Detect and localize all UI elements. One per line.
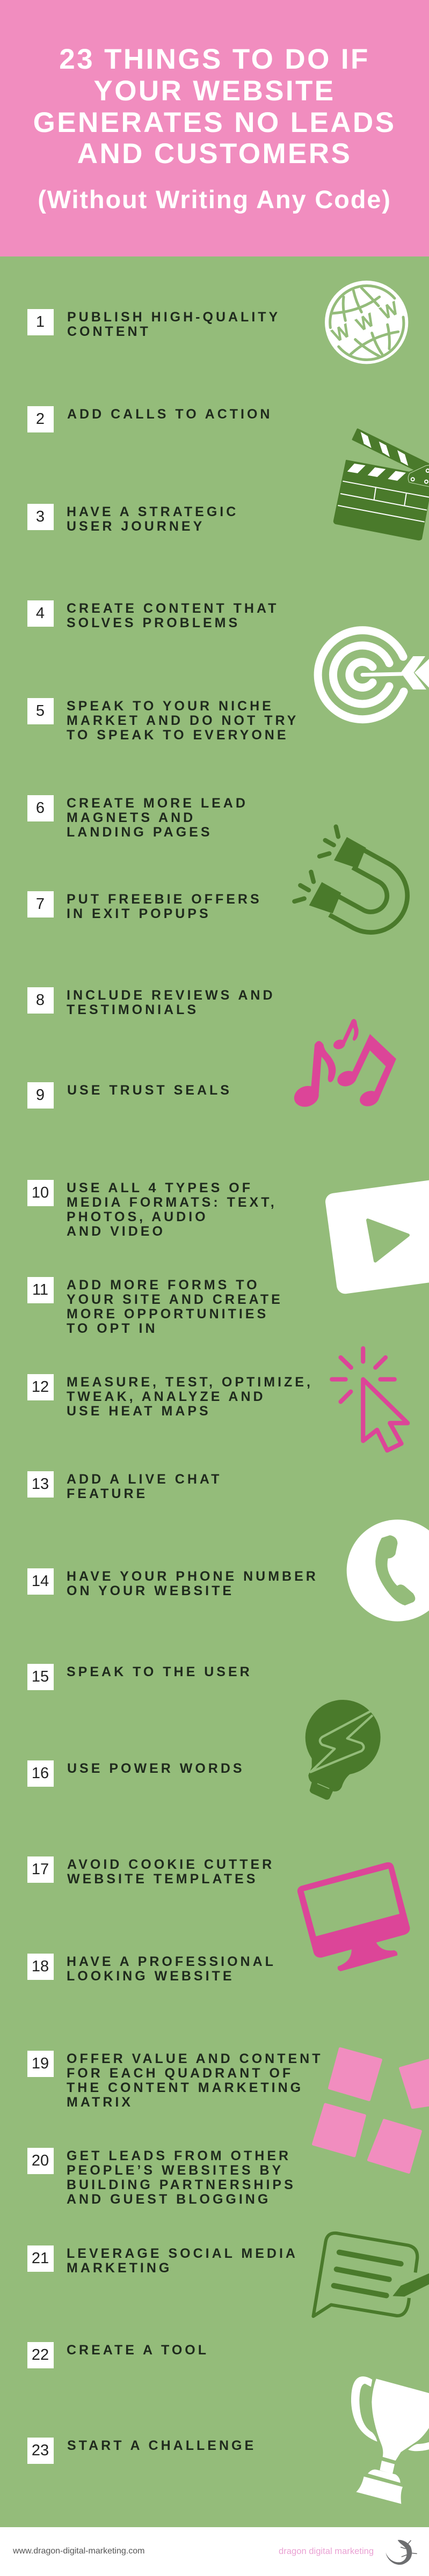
item 20 (27, 2148, 296, 2207)
item 11: 11 (32, 1281, 48, 1298)
item 15: SPEAK TO THE USER (67, 1664, 252, 1679)
item 2 (27, 406, 273, 432)
item 5: MARKET AND DO NOT TRY (67, 713, 299, 728)
item 22 (27, 2342, 209, 2368)
item 19: FOR EACH QUADRANT OF (67, 2066, 293, 2081)
icon: www globe: W (329, 321, 353, 346)
item 9 (27, 1082, 232, 1109)
item 4 (27, 600, 279, 630)
item 21: MARKETING (67, 2261, 172, 2276)
item 1 (27, 309, 280, 339)
item 12: 12 (32, 1378, 49, 1396)
item 14: HAVE YOUR PHONE NUMBER (67, 1569, 318, 1584)
icon: target with arrow (318, 630, 429, 720)
item 3: 3 (36, 508, 45, 525)
item 20: AND GUEST BLOGGING (67, 2192, 271, 2207)
subtitle: (Without Writing Any Code) (38, 185, 391, 214)
icon: www globe (325, 281, 408, 364)
item 12: USE HEAT MAPS (67, 1404, 211, 1419)
item 1: CONTENT (67, 324, 151, 339)
item 20: 20 (32, 2152, 49, 2169)
item 20: PEOPLE’S WEBSITES BY (67, 2163, 283, 2178)
item 12 (27, 1374, 313, 1419)
item 8: INCLUDE REVIEWS AND (67, 988, 275, 1003)
title: 23 THINGS TO DO IF (59, 43, 370, 75)
item 13: ADD A LIVE CHAT (67, 1472, 222, 1487)
icon: trophy (351, 2376, 429, 2504)
item 12: MEASURE, TEST, OPTIMIZE, (67, 1375, 313, 1390)
item 11: YOUR SITE AND CREATE (67, 1292, 283, 1307)
item 1: PUBLISH HIGH-QUALITY (67, 310, 280, 325)
item 11: ADD MORE FORMS TO (67, 1278, 260, 1293)
item 7: 7 (36, 896, 45, 913)
item 6: CREATE MORE LEAD (67, 796, 248, 811)
item 3 (27, 504, 238, 534)
item 19: MATRIX (67, 2095, 133, 2110)
item 3: USER JOURNEY (67, 519, 205, 534)
icon: film clapper (334, 429, 429, 540)
item 8: 8 (36, 992, 45, 1009)
item 8: TESTIMONIALS (67, 1002, 199, 1017)
item 5 (27, 698, 299, 743)
item 20: BUILDING PARTNERSHIPS (67, 2177, 296, 2192)
item 10: AND VIDEO (67, 1224, 165, 1239)
item 5: TO SPEAK TO EVERYONE (67, 728, 289, 743)
item 6: 6 (36, 799, 45, 817)
item 22: 22 (32, 2346, 49, 2364)
footer url: www.dragon-digital-marketing.com (13, 2546, 144, 2555)
item 2: ADD CALLS TO ACTION (67, 407, 273, 422)
icon: video play card (324, 1176, 429, 1295)
item 16: 16 (32, 1765, 49, 1782)
item 3: HAVE A STRATEGIC (67, 504, 238, 519)
header panel (0, 0, 429, 256)
item 10 (27, 1180, 277, 1239)
item 13: FEATURE (67, 1486, 148, 1501)
title (33, 43, 396, 170)
item 4: 4 (36, 605, 45, 622)
item 17: WEBSITE TEMPLATES (67, 1872, 258, 1887)
item 14: ON YOUR WEBSITE (67, 1583, 234, 1598)
item 4: SOLVES PROBLEMS (67, 615, 240, 630)
item 6 (27, 795, 248, 840)
item 17: AVOID COOKIE CUTTER (67, 1857, 274, 1872)
item 15 (27, 1664, 252, 1690)
item 10: PHOTOS, AUDIO (67, 1209, 208, 1224)
icon: content matrix squares (313, 2049, 429, 2172)
item 4: CREATE CONTENT THAT (67, 601, 279, 616)
item 16: USE POWER WORDS (67, 1761, 245, 1776)
item 7 (27, 891, 262, 921)
item 14 (27, 1568, 318, 1598)
item 8 (27, 987, 275, 1017)
icon: desktop monitor (297, 1862, 410, 1971)
item 11 (27, 1277, 283, 1336)
item 23 (27, 2438, 256, 2464)
item 6: LANDING PAGES (67, 825, 213, 840)
item 7: IN EXIT POPUPS (67, 906, 211, 921)
item 13 (27, 1471, 222, 1501)
item 17 (27, 1856, 274, 1887)
item 15: 15 (32, 1668, 49, 1685)
icon: magnet (294, 827, 408, 933)
item 5: SPEAK TO YOUR NICHE (67, 699, 274, 714)
icon: light bulb with bolt (306, 1700, 381, 1800)
item 11: TO OPT IN (67, 1321, 158, 1336)
title: AND CUSTOMERS (77, 138, 352, 170)
title: GENERATES NO LEADS (33, 107, 396, 138)
item 18 (27, 1954, 276, 1984)
item 10: MEDIA FORMATS: TEXT, (67, 1195, 277, 1210)
icon: dragon logo (386, 2540, 417, 2565)
icon: music notes (291, 1019, 396, 1110)
item 11: MORE OPPORTUNITIES (67, 1307, 268, 1322)
item 19: THE CONTENT MARKETING (67, 2080, 303, 2095)
item 19: OFFER VALUE AND CONTENT (67, 2051, 323, 2066)
icon: phone (347, 1520, 429, 1621)
item 19 (27, 2051, 323, 2110)
item 2: 2 (36, 410, 45, 428)
item 5: 5 (36, 702, 45, 720)
item 16 (27, 1760, 245, 1787)
item 17: 17 (32, 1861, 49, 1878)
item 1: 1 (36, 313, 45, 331)
icon: www globe: W (353, 310, 377, 335)
item 23: START A CHALLENGE (67, 2438, 256, 2453)
footer brand name: dragon digital marketing (279, 2545, 374, 2556)
item 23: 23 (32, 2442, 49, 2459)
item 19: 19 (32, 2055, 49, 2072)
item 12: TWEAK, ANALYZE AND (67, 1389, 266, 1404)
item 9: 9 (36, 1087, 45, 1104)
icon: chat bubble with pencil (313, 2233, 429, 2316)
item 7: PUT FREEBIE OFFERS (67, 892, 262, 907)
item 10: 10 (32, 1184, 49, 1201)
item 21 (27, 2245, 298, 2276)
item 18: HAVE A PROFESSIONAL (67, 1954, 276, 1969)
icon: click cursor (332, 1348, 408, 1450)
title: YOUR WEBSITE (93, 75, 336, 107)
item 22: CREATE A TOOL (67, 2343, 209, 2358)
item 14: 14 (32, 1573, 49, 1590)
item 21: 21 (32, 2250, 49, 2267)
item 9: USE TRUST SEALS (67, 1083, 232, 1098)
item 6: MAGNETS AND (67, 810, 195, 825)
item 21: LEVERAGE SOCIAL MEDIA (67, 2246, 298, 2261)
item 18: 18 (32, 1958, 49, 1975)
icon: www globe: W (377, 298, 402, 324)
item 13: 13 (32, 1476, 49, 1493)
item 20: GET LEADS FROM OTHER (67, 2148, 291, 2163)
item 10: USE ALL 4 TYPES OF (67, 1180, 253, 1195)
footer panel (0, 2527, 429, 2576)
item 18: LOOKING WEBSITE (67, 1969, 234, 1984)
